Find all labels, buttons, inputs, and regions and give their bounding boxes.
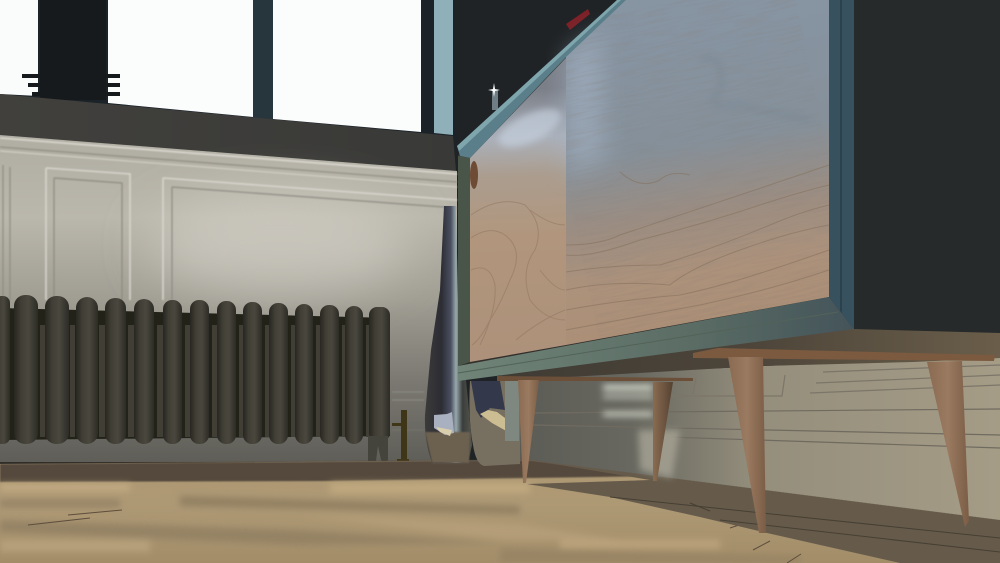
cast shadow on floor (527, 460, 1000, 563)
door grain (566, 165, 829, 330)
cabinet inner shadow (458, 0, 829, 366)
left leg plate (497, 376, 693, 381)
side panel (854, 0, 1000, 333)
top frame highlight (457, 0, 621, 151)
sideboard (457, 0, 1000, 533)
chrome vases (425, 206, 520, 466)
floor surface (0, 460, 1000, 563)
front right leg (927, 361, 969, 527)
bottom frame shading line (458, 312, 838, 373)
door cloud figure (700, 58, 810, 120)
tall vase lower reflection (425, 432, 470, 463)
radiator valve (392, 410, 409, 462)
window pane right (273, 0, 421, 132)
window sill band (0, 94, 456, 171)
skirting shadow line (0, 462, 520, 464)
floor dark back strip (0, 460, 660, 482)
radiator (0, 295, 409, 462)
right sliding door (552, 0, 829, 345)
floor plank joints (28, 510, 801, 563)
upper panel mouldings (672, 365, 1000, 396)
skirting wall (510, 355, 1000, 520)
window side reveal (434, 0, 453, 135)
sparkle (488, 83, 500, 97)
wall behind the legs (510, 355, 1000, 520)
window (0, 0, 455, 140)
silhouette outside the window (22, 0, 120, 100)
top frame (457, 0, 626, 158)
tall vase (425, 206, 472, 463)
door left glow (566, 30, 605, 175)
red ornament (566, 9, 590, 30)
shadow plank lines (610, 497, 1000, 552)
rear centre leg (653, 382, 673, 481)
underside (500, 328, 1000, 381)
right leg plate (693, 348, 995, 361)
rear left leg (518, 380, 539, 483)
left frame (458, 156, 470, 366)
right frame (829, 0, 854, 329)
fine grain texture (566, 16, 693, 142)
small vase on top (492, 90, 498, 110)
window frame (0, 0, 455, 140)
rear vase (469, 381, 520, 466)
front leg (728, 357, 766, 533)
radiator fins (0, 295, 390, 444)
panelled wall (0, 135, 457, 470)
sunlight patch on skirting (603, 385, 680, 478)
window pane left (0, 0, 38, 96)
items on sideboard (488, 9, 590, 110)
skirting mouldings (533, 409, 1000, 448)
wall highlight (150, 195, 410, 295)
wall surface (0, 135, 457, 470)
floor (0, 460, 1000, 563)
right frame edge (840, 0, 842, 315)
floor light and dark plank bands (0, 483, 800, 563)
radiator inner columns (40, 325, 371, 437)
radiator back (0, 308, 390, 440)
rear vase reflection (471, 381, 505, 418)
door grain (471, 202, 565, 345)
door pull (470, 161, 478, 189)
left sliding door (470, 58, 567, 362)
bottom frame (458, 297, 854, 381)
window pane centre (108, 0, 253, 117)
radiator foot (368, 436, 388, 462)
door highlight (493, 101, 567, 155)
wall mouldings (0, 138, 457, 430)
window mullion (253, 0, 273, 119)
